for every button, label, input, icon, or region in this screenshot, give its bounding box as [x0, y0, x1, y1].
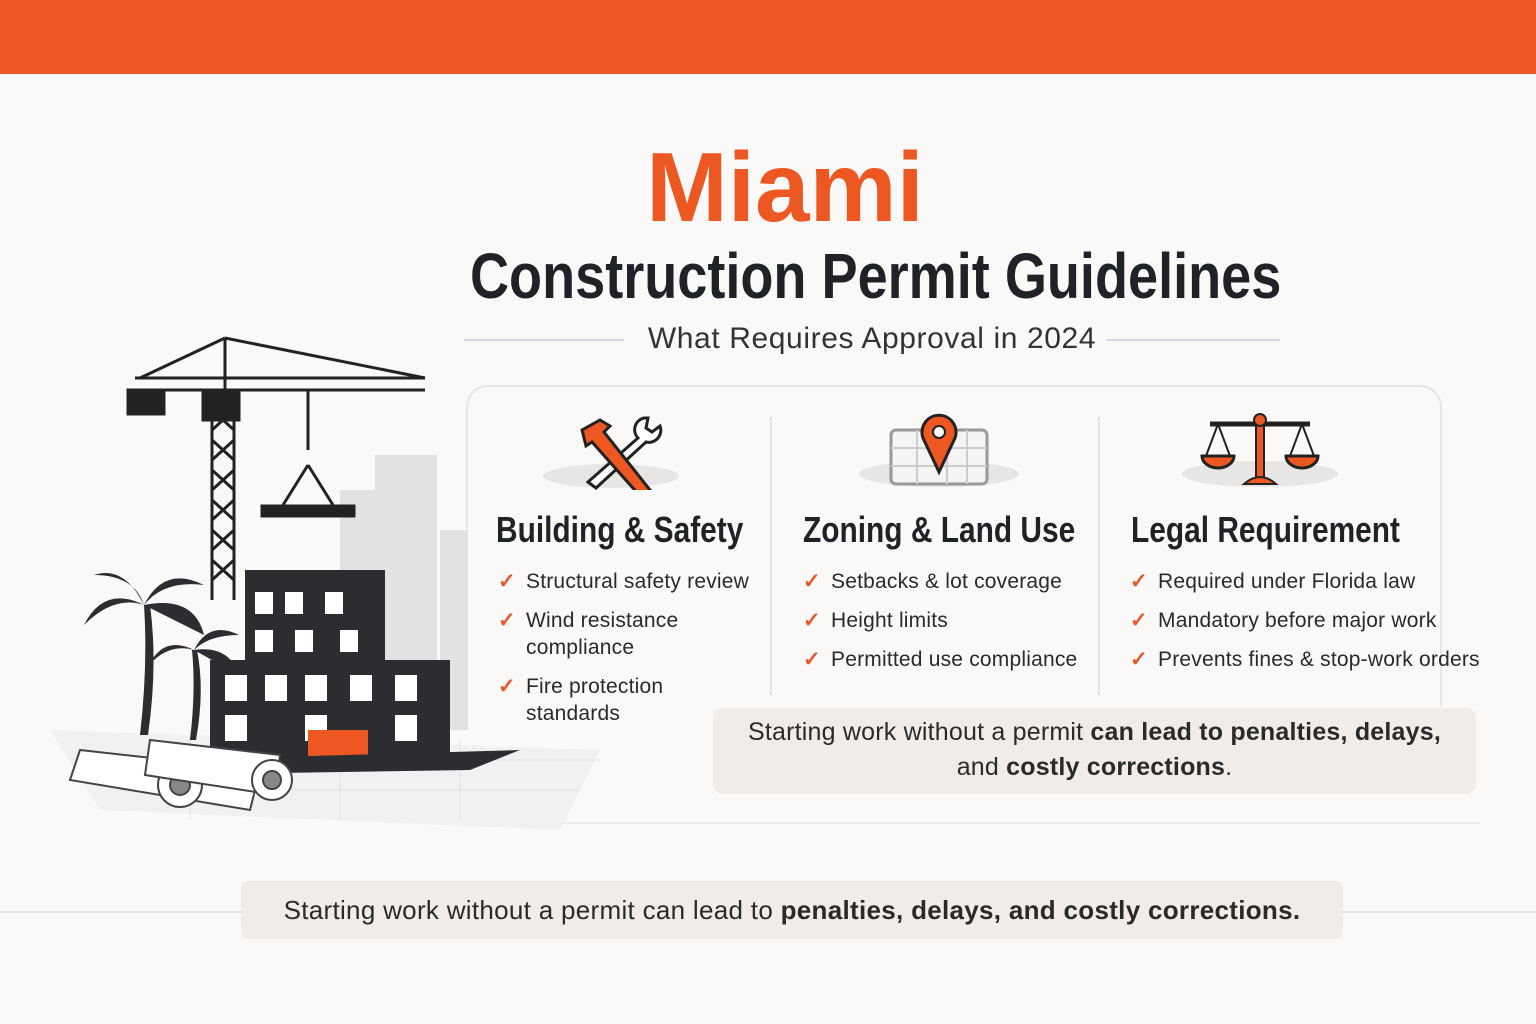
crane — [128, 338, 425, 600]
callout: warning: and costly corrections. — [957, 753, 1232, 781]
list: Height limits — [831, 609, 948, 632]
blueprints rolls — [70, 740, 292, 810]
icon: map pin — [859, 414, 1019, 487]
list: Permitted use compliance — [831, 648, 1077, 671]
list: Structural safety review — [526, 570, 749, 593]
list: Wind resistance — [526, 609, 678, 632]
list: Mandatory before major work — [1158, 609, 1437, 632]
heading: Building & Safety — [496, 509, 743, 550]
subtitle: What Requires Approval in 2024 — [648, 322, 1096, 355]
building — [150, 570, 520, 775]
icon: scales — [1182, 413, 1338, 487]
list: compliance — [526, 636, 634, 659]
panel: permit categories — [466, 385, 1442, 707]
bottom banner — [0, 911, 1536, 913]
list — [500, 570, 749, 725]
callout: warning: Starting work without a permit can lead to penalties, delays, — [748, 718, 1441, 746]
title: Miami: Miami — [646, 132, 924, 242]
top banner — [0, 0, 1536, 74]
list: Fire protection — [526, 675, 663, 698]
list: standards — [526, 702, 620, 725]
text: Starting work without a permit can lead to penalties, delays, and costly corrections. — [284, 895, 1300, 925]
background skyline — [340, 455, 468, 735]
divider line — [560, 822, 1480, 824]
column: building & safety — [496, 416, 749, 725]
list: Setbacks & lot coverage — [831, 570, 1062, 593]
heading: Legal Requirement — [1131, 509, 1400, 550]
list — [1132, 570, 1480, 671]
palm trees — [84, 573, 239, 740]
list: Required under Florida law — [1158, 570, 1415, 593]
list: Prevents fines & stop-work orders — [1158, 648, 1480, 671]
callout: warning — [713, 708, 1476, 794]
column: legal requirement — [1131, 413, 1480, 671]
ground — [50, 730, 600, 830]
column: zoning & land use — [803, 414, 1077, 671]
heading: Construction Permit Guidelines — [470, 240, 1281, 312]
icon: hammer and wrench — [543, 416, 679, 490]
heading: Zoning & Land Use — [803, 509, 1075, 550]
list — [806, 570, 1077, 671]
illustration: construction site — [50, 336, 600, 830]
